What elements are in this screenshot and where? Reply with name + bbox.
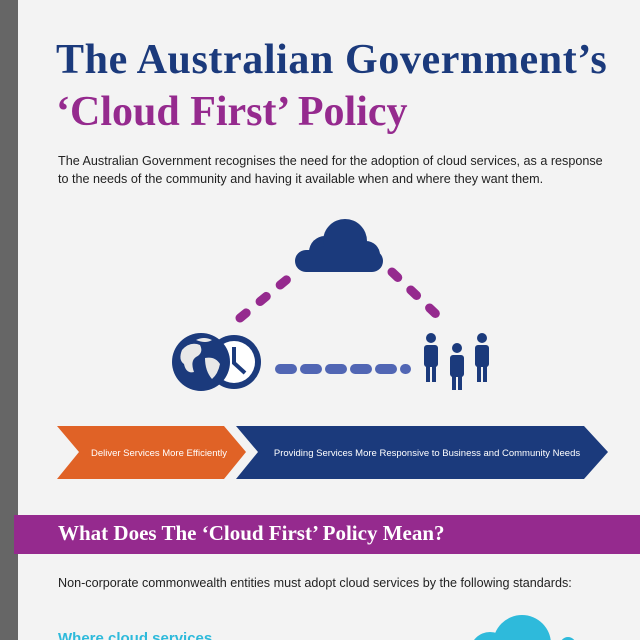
arrow: orange: Deliver Services More Efficiently (91, 448, 227, 459)
purple banner (14, 515, 640, 554)
blue dashed line (280, 364, 406, 374)
arrow: orange (57, 426, 246, 479)
icon: cloud (295, 219, 383, 272)
icon: cyan cloud (470, 615, 576, 640)
intro text: The Australian Government recognises the need for the adoption of cloud services, as a response to the needs of the community and having it available when and where they want them. (58, 154, 603, 186)
left gray strip (0, 0, 18, 640)
purple dashed lines (240, 272, 438, 318)
icon: people (424, 333, 489, 390)
purple banner: What Does The ‘Cloud First’ Policy Mean? (58, 521, 445, 545)
title (56, 37, 607, 135)
standards text: Non-corporate commonwealth entities must adopt cloud services by the following standards: (58, 576, 572, 590)
title: ‘Cloud First’ Policy (56, 89, 408, 135)
icon: globe and clock (172, 333, 261, 391)
title: The Australian Government’s (56, 37, 607, 83)
arrow: blue: Providing Services More Responsive to Business and Community Needs (274, 448, 580, 459)
arrow: blue (236, 426, 608, 479)
